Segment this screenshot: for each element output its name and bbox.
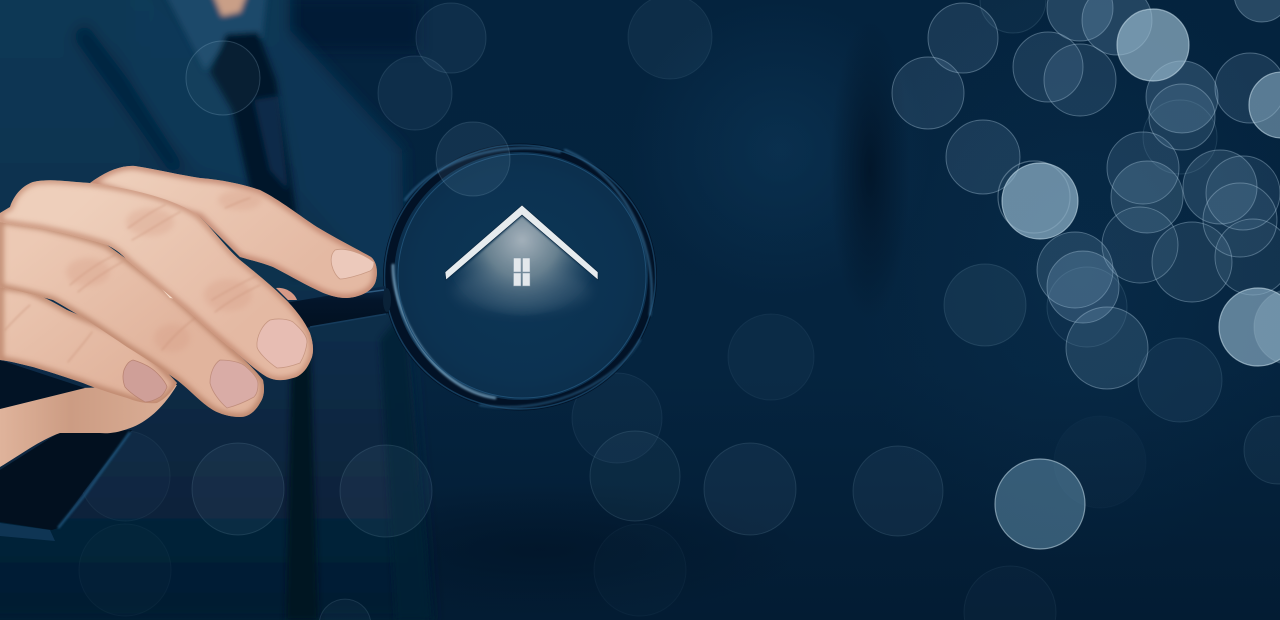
left lapel fold shadow	[72, 22, 185, 172]
bokeh over suit	[79, 41, 432, 620]
right lapel panel	[278, 30, 400, 290]
handle of magnifying glass	[285, 286, 391, 328]
bokeh lights: faint	[378, 0, 1280, 620]
window	[514, 258, 530, 286]
roof	[445, 205, 598, 280]
little finger	[0, 285, 177, 403]
rim highlights	[393, 148, 652, 407]
sliver between fingers	[158, 285, 177, 299]
hand	[0, 166, 377, 467]
rim	[383, 144, 657, 410]
bokeh lights: medium	[892, 0, 1280, 389]
lens	[394, 152, 648, 400]
wrinkle tint at knuckles	[66, 190, 262, 352]
middle finger	[0, 180, 313, 380]
icon: house	[445, 205, 598, 316]
sleeve cuff	[0, 430, 132, 541]
shirt placket shadow	[286, 340, 318, 620]
lower palm	[0, 385, 177, 467]
thumb tip behind fingers	[276, 288, 297, 300]
neck	[207, 0, 252, 16]
handle lower segment held in palm	[0, 360, 85, 409]
jacket body	[0, 0, 432, 620]
ring finger	[0, 220, 264, 417]
lower jacket shade	[380, 310, 432, 620]
lapel lighter panel	[130, 0, 268, 190]
top finger	[90, 166, 377, 298]
bokeh lights: bright	[995, 9, 1280, 549]
necktie	[210, 32, 296, 280]
businessman suit	[0, 0, 432, 620]
magnifying glass	[383, 122, 657, 410]
lens reflection of bokeh	[436, 122, 510, 196]
knuckle creases	[5, 198, 260, 362]
shirt collar	[158, 0, 268, 70]
